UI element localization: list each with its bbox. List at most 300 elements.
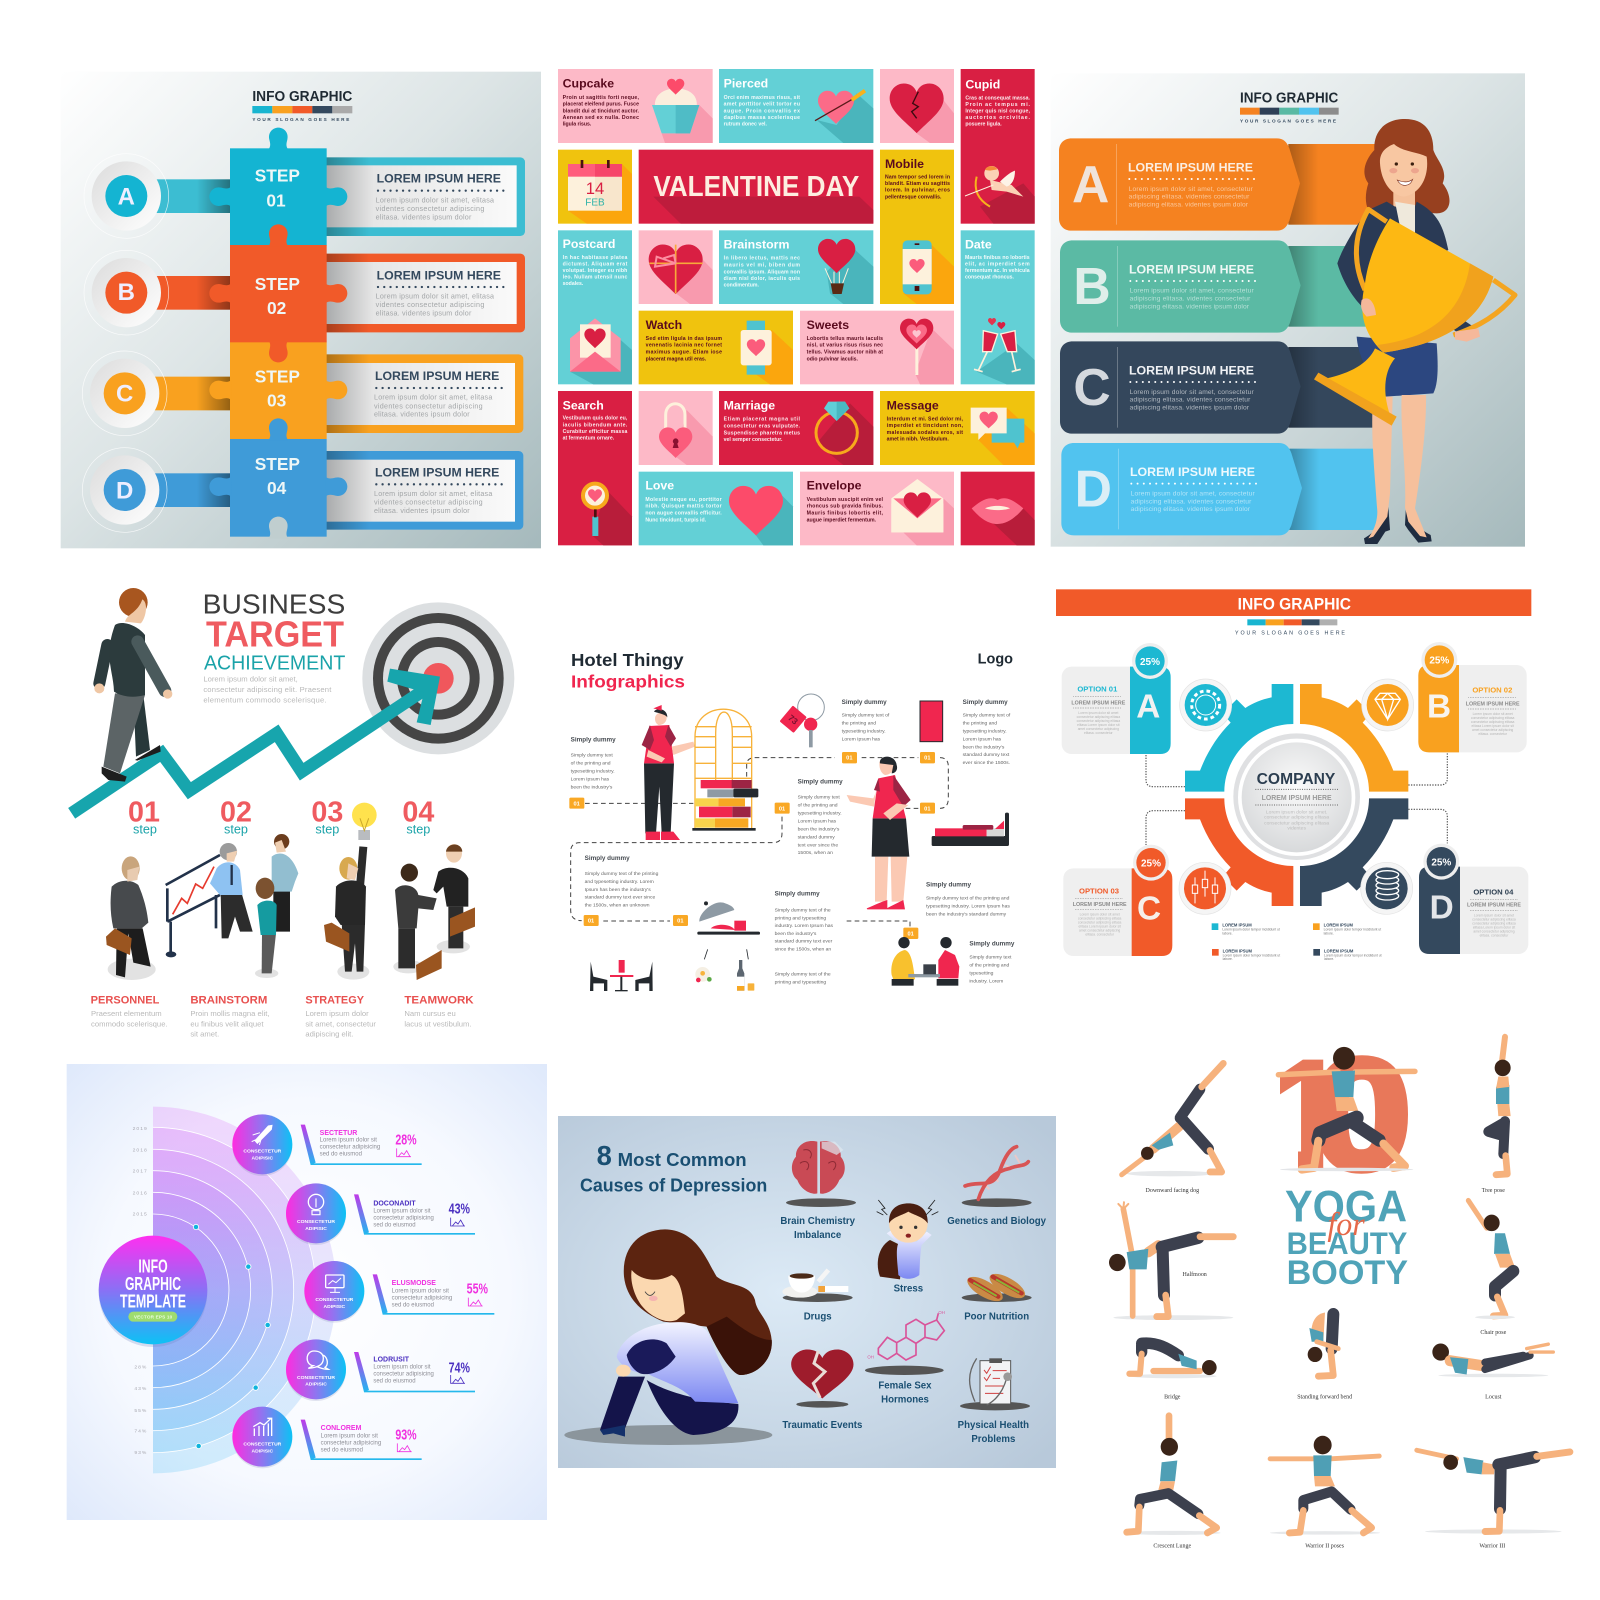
tile: valentine day title: VALENTINE DAY <box>653 171 859 203</box>
text blocks: simply dummy: been the industry's standard dummy <box>926 911 1007 917</box>
tile: broken heart <box>880 69 954 143</box>
company centre circle <box>1230 730 1363 863</box>
text blocks: simply dummy: Lorem Ipsum has <box>798 818 837 824</box>
tile: sweets: Sweets <box>807 318 849 332</box>
node: lodrusit: CONSECTETUR <box>297 1375 335 1381</box>
node: doconadit: CONSECTETUR <box>297 1219 335 1225</box>
card: option 02 <box>1418 642 1527 752</box>
captions: sit amet, consectetur <box>305 1019 376 1028</box>
tile: calendar: FEB <box>585 198 605 209</box>
card: option 03: Lorem ipsum dolor sit amet <box>1080 913 1120 917</box>
card: option 02: consectetur adipiscing elitasa <box>1471 716 1515 720</box>
row C connector and text box: LOREM IPSUM HERE <box>375 369 499 383</box>
illustration: receptionist <box>847 757 911 909</box>
option D banner: Lorem ipsum dolor sit amet, consectetur <box>1131 491 1255 498</box>
figure: half moon: Halfmoon <box>1183 1271 1207 1278</box>
card: option 04 <box>1419 844 1528 954</box>
icon: room key <box>780 694 824 747</box>
tile: postcard: In hac habitasse platea <box>563 255 627 261</box>
row B connector and text box: videntes consectetur adipiscing <box>376 301 484 309</box>
card: option 02: amet consectetur adipiscing <box>1472 728 1513 732</box>
card: option 04: consectetur adipiscing elitasa <box>1472 922 1516 926</box>
card: option 03: amet consectetur adipiscing <box>1079 929 1120 933</box>
step numbers: 02 <box>220 797 252 829</box>
text blocks: simply dummy: printing and typesetting <box>775 915 826 921</box>
row B connector and text box: elitasa. videntes ipsum dolor <box>376 310 472 318</box>
node: doconadit: 43% <box>449 1201 470 1218</box>
node: elusmodse <box>304 1261 494 1323</box>
node: doconadit: DOCONADIT <box>373 1201 416 1208</box>
captions: adipiscing elit. <box>305 1030 353 1039</box>
figure: locust <box>1432 1343 1553 1401</box>
node: sectetur: SECTETUR <box>320 1130 357 1137</box>
option B banner: adipiscing elitasa. videntes consectetur <box>1130 296 1251 303</box>
tile: brainstorm balloon <box>719 230 873 304</box>
step numbers: step <box>133 822 157 836</box>
legend: Lorem ipsum dolor tempor incididunt ut <box>1223 953 1280 957</box>
text blocks: simply dummy: Simply dummy text of the <box>775 971 831 977</box>
dotted connectors <box>1146 753 1447 845</box>
illustration: luggage cart <box>692 709 758 831</box>
tile: search: at fermentum ornare. <box>563 436 615 442</box>
card: option 02: B <box>1427 688 1451 725</box>
text blocks: simply dummy: been the industry's <box>571 784 613 790</box>
text blocks: simply dummy: Simply dummy <box>926 881 971 888</box>
legend: LOREM IPSUM <box>1324 948 1354 953</box>
heading: business target achievement: consectetur adipiscing elit. Praesent <box>203 685 332 694</box>
row D connector and text box: LOREM IPSUM HERE <box>375 465 499 479</box>
row B connector and text box <box>153 254 525 332</box>
legend: labore. <box>1324 931 1334 935</box>
tile: cupcake: blandit dui at tincidunt auctor. <box>563 108 640 114</box>
cause: genetics: Genetics and Biology <box>947 1216 1047 1227</box>
step badges: 01 <box>908 931 914 937</box>
tile: pierced heart: Orci enim maximus risus, sit <box>724 95 800 101</box>
card: option 02: 25% <box>1429 656 1449 667</box>
axis labels: 74% <box>134 1429 147 1435</box>
tile: love <box>639 472 793 545</box>
option B banner: Lorem ipsum dolor sit amet, consectetur <box>1130 288 1254 295</box>
option D banner: adipiscing elitasa. videntes consectetur <box>1131 498 1252 505</box>
illustration: check-in desk <box>891 937 959 986</box>
panel: valentine day tiles <box>558 69 1035 545</box>
captions: BRAINSTORM <box>190 994 267 1006</box>
heading: business target achievement: Lorem ipsum dolor sit amet, <box>203 675 298 684</box>
node: elusmodse: ELUSMODSE <box>392 1280 436 1287</box>
option A banner: adipiscing elitasa. videntes ipsum dolor <box>1129 201 1249 208</box>
central circle: info graphic template: GRAPHIC <box>125 1273 181 1294</box>
option B banner <box>1060 240 1378 333</box>
tile: padlock <box>639 391 713 465</box>
tile: cupid: Cupid <box>965 77 1000 91</box>
captions: Lorem ipsum dolor <box>305 1009 369 1018</box>
heading: yoga for beauty booty: YOGA <box>1285 1182 1407 1232</box>
card: option 01: elitasa. consectetur <box>1084 731 1114 735</box>
heading: 8 most common causes: Causes of Depression <box>580 1175 767 1196</box>
node: sectetur: consectetur adipisicing <box>320 1145 380 1151</box>
text blocks: simply dummy: since the 1500s, when an <box>775 947 831 953</box>
card: option 04: consectetur adipiscing elitasa <box>1472 918 1516 922</box>
company centre circle: consectetur adipiscing elitasa <box>1264 815 1329 821</box>
gear quadrants <box>1185 684 1408 906</box>
captions: eu finibus velit aliquet <box>190 1019 264 1028</box>
node: elusmodse: Lorem ipsum dolor sit <box>392 1288 449 1294</box>
title: info graphic: YOUR SLOGAN GOES HERE <box>252 117 349 122</box>
cause: brain chemistry: Imbalance <box>794 1230 842 1241</box>
legend: Lorem ipsum dolor tempor incididunt ut <box>1222 928 1280 932</box>
text blocks: simply dummy: ever since the 1500s. <box>963 760 1010 766</box>
card: option 04: Lorem ipsum dolor sit amet <box>1474 914 1514 918</box>
big number 10 <box>1280 1055 1408 1174</box>
tile: cupcake: Aenean sed ex nulla. Donec <box>563 115 639 121</box>
title: info graphic <box>252 89 353 122</box>
captions: commodo scelerisque. <box>91 1019 168 1028</box>
letter circles A to D: D <box>116 477 133 504</box>
option A banner: adipiscing elitasa. videntes consectetur <box>1129 194 1250 201</box>
tile: marriage ring: vel semper consectetur. <box>724 437 783 443</box>
node: lodrusit: sed do eiusmod <box>373 1379 416 1385</box>
cause: brain chemistry <box>780 1141 856 1241</box>
company centre circle: Lorem ipsum dolor sit amet. <box>1266 809 1327 815</box>
group: brainstorm chart <box>166 834 298 978</box>
cause: genetics <box>947 1147 1047 1227</box>
heading: hotel thingy: Hotel Thingy <box>571 650 684 670</box>
icon: fried egg and bottle <box>695 949 754 991</box>
icon: serving cloche <box>697 901 760 935</box>
title: info graphic: INFO GRAPHIC <box>252 89 353 105</box>
heading: hotel thingy <box>571 650 685 692</box>
tile: message: amet in nibh. Vestibulum. <box>887 437 949 443</box>
heading: business target achievement: BUSINESS <box>203 588 345 619</box>
node: conlorem: CONLOREM <box>321 1425 362 1432</box>
tile: message: Interdum et mi. Sed dolor mi, <box>887 416 964 422</box>
figure: bridge: Bridge <box>1164 1394 1181 1401</box>
figure: standing forward bend: Standing forward bend <box>1297 1393 1352 1401</box>
figure: bridge <box>1129 1343 1217 1401</box>
tile: date: fermentum ac. In vehicula <box>965 268 1030 274</box>
cause: poor nutrition <box>962 1269 1032 1322</box>
tile: calendar: 14 <box>586 179 604 198</box>
tile: cupcake: Proin ut sagittis forti neque, <box>563 95 640 101</box>
axis labels: 2019 <box>133 1126 148 1132</box>
text blocks: simply dummy: of the printing and <box>798 803 838 809</box>
text blocks: simply dummy: Simply dummy <box>798 779 843 786</box>
card: option 03: OPTION 03 <box>1079 887 1119 896</box>
tile: sweets <box>800 311 954 384</box>
figure: standing forward bend <box>1297 1312 1352 1401</box>
card: option 03: elitasa. consectetur <box>1085 933 1115 937</box>
text blocks: simply dummy: 1500s, when an <box>798 850 833 856</box>
axis labels: 43% <box>134 1386 147 1392</box>
person: strategy with light bulb <box>324 803 377 980</box>
tile: pierced heart: Pierced <box>724 77 768 91</box>
tile: date <box>961 230 1035 384</box>
tile: sweets: odio pulvinar iaculis. <box>807 356 859 362</box>
banner: info graphic <box>1056 589 1531 636</box>
text blocks: simply dummy: standard dummy text ever <box>775 939 833 945</box>
node: lodrusit <box>286 1339 475 1401</box>
tile: brainstorm balloon: mauris vel mi, biben dum <box>724 263 800 269</box>
figure: half moon <box>1109 1202 1233 1320</box>
option C banner: Lorem ipsum dolor sit amet, consectetur <box>1130 389 1254 396</box>
card: option 01: consectetur adipiscing elitasa <box>1077 715 1120 719</box>
node: lodrusit: Lorem ipsum dolor sit <box>373 1365 431 1371</box>
figure: warrior III <box>1417 1450 1570 1550</box>
node: sectetur <box>232 1114 422 1176</box>
heading: business target achievement: TARGET <box>206 614 344 654</box>
row B connector and text box: Lorem ipsum dolor sit amet, elitasa <box>376 293 494 301</box>
text blocks: simply dummy: Lorem Ipsum has <box>571 776 610 782</box>
card: option 01: consectetur adipiscing elitasa <box>1077 719 1120 723</box>
node: conlorem: ADIPISIC <box>252 1449 274 1455</box>
letter circles A to D: A <box>118 183 135 210</box>
figure: tree pose: Tree pose <box>1482 1188 1505 1194</box>
node: doconadit: Lorem ipsum dolor sit <box>373 1209 431 1215</box>
captions: sit amet. <box>190 1030 219 1039</box>
tile: postcard <box>558 230 632 384</box>
card: option 02: Lorem ipsum dolor sit amet <box>1473 712 1513 716</box>
text blocks: simply dummy: printing and typesetting <box>775 979 826 985</box>
tile: marriage ring: Etiam placerat magna util <box>724 417 801 423</box>
node: conlorem: CONSECTETUR <box>243 1442 282 1448</box>
text blocks: simply dummy <box>571 699 1015 985</box>
tile: message: malesuada sodales eros, sit <box>887 430 963 436</box>
card: option 04: 25% <box>1431 857 1451 868</box>
tile: search: Vestibulum quis dolor eu, <box>563 416 628 422</box>
node: lodrusit: 74% <box>449 1359 470 1376</box>
tile: mobile: blandit. Etiam eu sagittis <box>885 181 950 187</box>
icon circles <box>1179 679 1414 914</box>
icon: bed <box>932 813 1009 846</box>
figure: warrior over ten <box>1278 1047 1415 1171</box>
tile: mobile <box>880 150 954 304</box>
captions: Nam cursus eu <box>404 1009 456 1018</box>
node: elusmodse: CONSECTETUR <box>315 1297 354 1303</box>
text blocks: simply dummy: Lorem Ipsum has <box>842 736 881 742</box>
tile: postcard: Postcard <box>563 237 615 251</box>
walking businessman <box>94 588 172 782</box>
tile: envelope: Vestibulum suscipit enim vel <box>807 497 884 503</box>
option B banner: B <box>1073 257 1111 315</box>
tile: watch: venenatis lacinia nec fornet <box>646 343 722 349</box>
text blocks: simply dummy: the printing and <box>963 721 997 727</box>
tile: envelope: rhoncus sub gravida finibus. <box>807 504 884 510</box>
step numbers: step <box>406 822 430 836</box>
option C banner <box>1060 341 1378 434</box>
card: option 01: A <box>1136 689 1160 726</box>
option C banner: LOREM IPSUM HERE <box>1129 363 1254 377</box>
text blocks: simply dummy: Simply dummy <box>969 941 1015 948</box>
figure: crescent lunge <box>1124 1416 1221 1550</box>
cause: female sex hormones: Female Sex <box>878 1381 932 1392</box>
step badges: 01 <box>588 919 594 925</box>
tile: cupcake: Cupcake <box>563 77 614 91</box>
legend: labore. <box>1324 957 1334 961</box>
card: option 03: 25% <box>1141 858 1161 869</box>
tile: envelope: Mauris finibus lobortis elit, <box>807 510 884 516</box>
cause: poor nutrition: Poor Nutrition <box>964 1311 1029 1322</box>
panel: gradient semicircle infographic <box>67 1064 547 1520</box>
row B connector and text box: LOREM IPSUM HERE <box>377 268 501 282</box>
text blocks: simply dummy: Simply dummy text of the <box>775 907 831 913</box>
tile: pierced heart: dapibus massa scelerisque <box>724 115 800 121</box>
text blocks: simply dummy: standard dummy text ever since <box>585 895 656 901</box>
cause: physical health <box>958 1358 1030 1445</box>
tile: sweets: tellus. Vivamus auctor nibh at <box>807 350 883 356</box>
text blocks: simply dummy: the 1500s, when an unknown <box>585 903 650 909</box>
cause: stress <box>877 1200 938 1295</box>
card: option 04: elitasa. consectetur <box>1480 934 1509 938</box>
node: elusmodse: sed do eiusmod <box>392 1302 434 1308</box>
tile: sweets: nisl, ut varius risus risus nec <box>807 343 883 349</box>
card: option 01: 25% <box>1140 657 1160 668</box>
central circle: info graphic template: TEMPLATE <box>120 1290 186 1311</box>
node: elusmodse: consectetur adipisicing <box>392 1295 452 1301</box>
tile: lips <box>961 472 1035 545</box>
panel: puzzle steps infographic <box>61 72 541 548</box>
figure: locust: Locust <box>1485 1394 1502 1401</box>
tile: brainstorm balloon: In libero lectus, mattis nec <box>724 256 800 262</box>
icon: dining table <box>590 960 653 991</box>
heading: hotel thingy: Infographics <box>571 672 685 692</box>
axis labels <box>133 1126 148 1456</box>
tile: calendar <box>558 150 632 224</box>
tile: message <box>880 391 1035 465</box>
step badges: 01 <box>574 801 580 807</box>
step numbers: step <box>224 822 248 836</box>
text blocks: simply dummy: Simply dummy <box>842 699 887 706</box>
tile: watch <box>639 311 793 384</box>
dashed route <box>571 758 948 927</box>
node: sectetur: ADIPISIC <box>252 1156 274 1162</box>
company centre circle: COMPANY <box>1257 771 1336 788</box>
figure: warrior II: Warrior II poses <box>1305 1544 1345 1550</box>
text blocks: simply dummy: been the industry's <box>963 744 1005 750</box>
figure: chair pose: Chair pose <box>1480 1330 1507 1336</box>
text blocks: simply dummy: industry. Lorem Ipsum has <box>775 923 834 929</box>
step numbers: 03 <box>311 797 343 829</box>
card: option 04: amet consectetur adipiscing <box>1473 930 1515 934</box>
central circle: info graphic template: INFO <box>138 1256 168 1277</box>
letter circles A to D: B <box>118 279 135 306</box>
cause: female sex hormones <box>865 1310 945 1406</box>
text blocks: simply dummy: and typesetting industry. Lorem <box>585 879 654 885</box>
card: option 03: C <box>1137 890 1161 927</box>
tile: watch: Watch <box>646 318 682 332</box>
text blocks: simply dummy: Simply dummy text of <box>963 713 1011 719</box>
tile: love: non augue convallis efficitur. <box>645 510 722 516</box>
tile: pierced heart: rutrum donec vel. <box>724 122 767 128</box>
cause: brain chemistry: Brain Chemistry <box>780 1216 856 1227</box>
tile: watch: placerat magna util eras. <box>646 356 707 362</box>
axis labels: 28% <box>134 1364 147 1370</box>
tile: message: imperdiet et tincidunt non, <box>887 423 964 429</box>
node: doconadit: ADIPISIC <box>305 1226 327 1232</box>
title: info graphic: INFO GRAPHIC <box>1240 90 1339 106</box>
tile: search: Curabitur efficitur massa <box>563 429 627 435</box>
axis labels: 55% <box>134 1408 147 1414</box>
legend: LOREM IPSUM <box>1324 923 1354 928</box>
text blocks: simply dummy: typesetting industry. <box>963 729 1007 735</box>
step badges: 01 <box>924 806 930 812</box>
option D banner: D <box>1075 460 1112 518</box>
panel: causes of depression <box>558 1116 1056 1468</box>
row D connector and text box <box>153 451 523 530</box>
captions: TEAMWORK <box>404 994 474 1006</box>
text blocks: simply dummy: Simply dummy <box>571 737 616 744</box>
option D banner: LOREM IPSUM HERE <box>1130 465 1255 479</box>
people: teamwork handshake <box>393 844 475 980</box>
tile: envelope: augue imperdiet fermentum. <box>807 517 877 523</box>
text blocks: simply dummy: Lorem Ipsum has <box>963 736 1002 742</box>
captions: PERSONNEL <box>91 994 160 1006</box>
row A connector and text box: elitasa. videntes ipsum dolor <box>376 213 472 221</box>
figure: warrior III: Warrior III <box>1479 1544 1505 1550</box>
banner: info graphic: YOUR SLOGAN GOES HERE <box>1235 630 1345 636</box>
tile: date: consequat rhoncus. <box>965 275 1015 281</box>
panel: company gear infographic <box>1056 589 1531 961</box>
target <box>362 602 514 754</box>
text blocks: simply dummy: Simply dummy text of <box>842 713 890 719</box>
node: doconadit: consectetur adipisicing <box>373 1216 434 1222</box>
option A banner: LOREM IPSUM HERE <box>1128 160 1253 174</box>
row C connector and text box: elitasa. videntes ipsum dolor <box>374 411 470 419</box>
company centre circle: LOREM IPSUM HERE <box>1262 795 1332 802</box>
captions: lacus ut vestibulum. <box>404 1019 472 1028</box>
tile: search: iaculis bibendum ante. <box>563 422 628 428</box>
tile: marriage ring: Suspendisse pharetra metus <box>724 430 800 436</box>
option C banner: adipiscing elitasa. videntes consectetur <box>1130 397 1251 404</box>
tile: date: elit, ac imperdiet sem <box>965 262 1030 268</box>
panel: business target achievement <box>72 588 514 1039</box>
row D connector and text box: videntes consectetur adipiscing <box>374 499 483 507</box>
card: option 03 <box>1063 845 1172 956</box>
cause: traumatic events: Traumatic Events <box>782 1420 862 1431</box>
node: doconadit: sed do eiusmod <box>373 1223 416 1229</box>
card: option 01: LOREM IPSUM HERE <box>1071 700 1126 706</box>
title: info graphic: YOUR SLOGAN GOES HERE <box>1240 118 1336 123</box>
captions: STRATEGY <box>305 994 364 1006</box>
tile: search: Search <box>563 398 604 412</box>
cause: drugs <box>782 1270 853 1322</box>
tile: valentine day title <box>639 150 873 224</box>
text blocks: simply dummy: Ipsum has been the industry's <box>585 887 651 893</box>
cause: physical health: Physical Health <box>958 1420 1029 1431</box>
row C connector and text box: Lorem ipsum dolor sit amet, elitasa <box>374 394 492 402</box>
card: option 01 <box>1062 643 1171 754</box>
node: conlorem: sed do eiusmod <box>321 1447 363 1453</box>
tile: date: Mauris finibus no lobortis <box>965 255 1030 261</box>
step badges: 01 <box>924 756 930 762</box>
card: option 04: LOREM IPSUM HERE <box>1467 903 1521 909</box>
tile: love: nibh. Quisque mattis tortor <box>645 504 722 510</box>
figure: chair pose <box>1468 1200 1515 1336</box>
node: lodrusit: ADIPISIC <box>305 1382 327 1388</box>
node: sectetur: Lorem ipsum dolor sit <box>320 1138 377 1144</box>
text blocks: simply dummy: Simply dummy text <box>571 753 613 759</box>
heading: business target achievement <box>203 588 345 704</box>
tile: sweets: Lobortis tellus mauris iaculis <box>807 336 883 342</box>
card: option 02: LOREM IPSUM HERE <box>1466 701 1520 707</box>
tile: cupid: Proin ac tempus mi. <box>965 102 1031 108</box>
legend: Lorem ipsum dolor tempor incididunt ut <box>1324 928 1381 932</box>
captions <box>91 994 474 1039</box>
tile: date: Date <box>965 237 992 251</box>
tile: cupid: Integer quis nisl congue, <box>965 109 1031 115</box>
puzzle pieces: STEP <box>255 367 300 387</box>
row D connector and text box: elitasa. videntes ipsum dolor <box>374 507 470 515</box>
legend: labore. <box>1223 957 1233 961</box>
